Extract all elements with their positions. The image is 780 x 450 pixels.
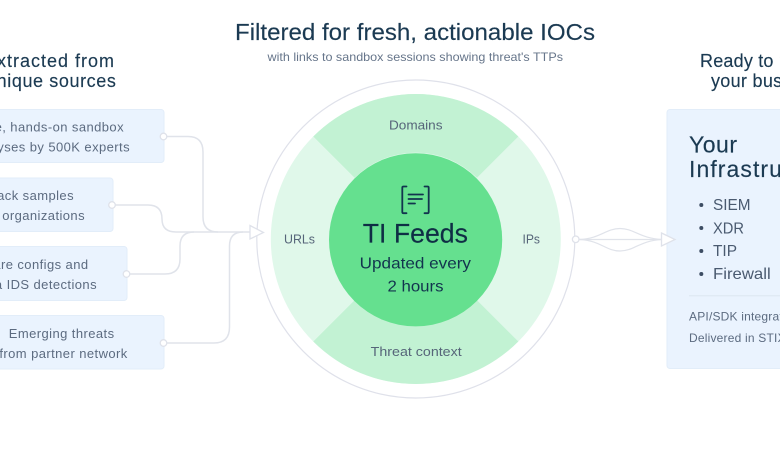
icon: document feed (402, 186, 429, 213)
centre text: Updated every (360, 256, 471, 272)
heading: sources (0, 51, 116, 91)
outer ring (257, 80, 575, 398)
list of systems: Firewall (713, 266, 771, 283)
segment: domains (313, 94, 518, 178)
arrow: into infrastructure (662, 233, 675, 246)
segment: threat context: Threat context (371, 344, 462, 359)
subtitle: with links to sandbox sessions showing threat's TTPs (266, 50, 563, 64)
connectors: sources to feeds (113, 136, 252, 343)
heading: delivery (700, 51, 780, 91)
centre circle (329, 153, 502, 326)
panel heading: Your (689, 132, 737, 158)
panel: source 2 (0, 178, 115, 232)
delivery notes (689, 310, 780, 345)
segment: domains: Domains (389, 118, 443, 132)
list of systems: XDR (713, 220, 744, 237)
divider (689, 295, 780, 296)
output node (572, 236, 579, 243)
centre heading: TI Feeds (363, 218, 468, 248)
panel: source 3 (0, 246, 130, 300)
panel: your infrastructure (667, 110, 780, 368)
list of systems (699, 197, 771, 283)
panel: source 4 (0, 316, 167, 369)
centre text: 2 hours (388, 278, 444, 296)
segment label: URLs: URLs (284, 232, 315, 246)
panel: source 4: Emerging threats (9, 326, 115, 341)
arrow: into feeds (250, 226, 264, 239)
list of systems: TIP (713, 243, 737, 260)
segment: threat context (313, 300, 518, 384)
segment label: IPs: IPs (522, 232, 540, 246)
panel: source 4: from partner network (0, 346, 128, 361)
segment ring (271, 94, 561, 384)
panel: source 1 (0, 110, 167, 162)
connectors: feeds to infrastructure (576, 228, 664, 251)
title: Filtered for fresh, actionable IOCs (235, 19, 595, 45)
list of systems: SIEM (713, 197, 750, 214)
centre text (360, 256, 471, 296)
panel heading (689, 132, 780, 182)
